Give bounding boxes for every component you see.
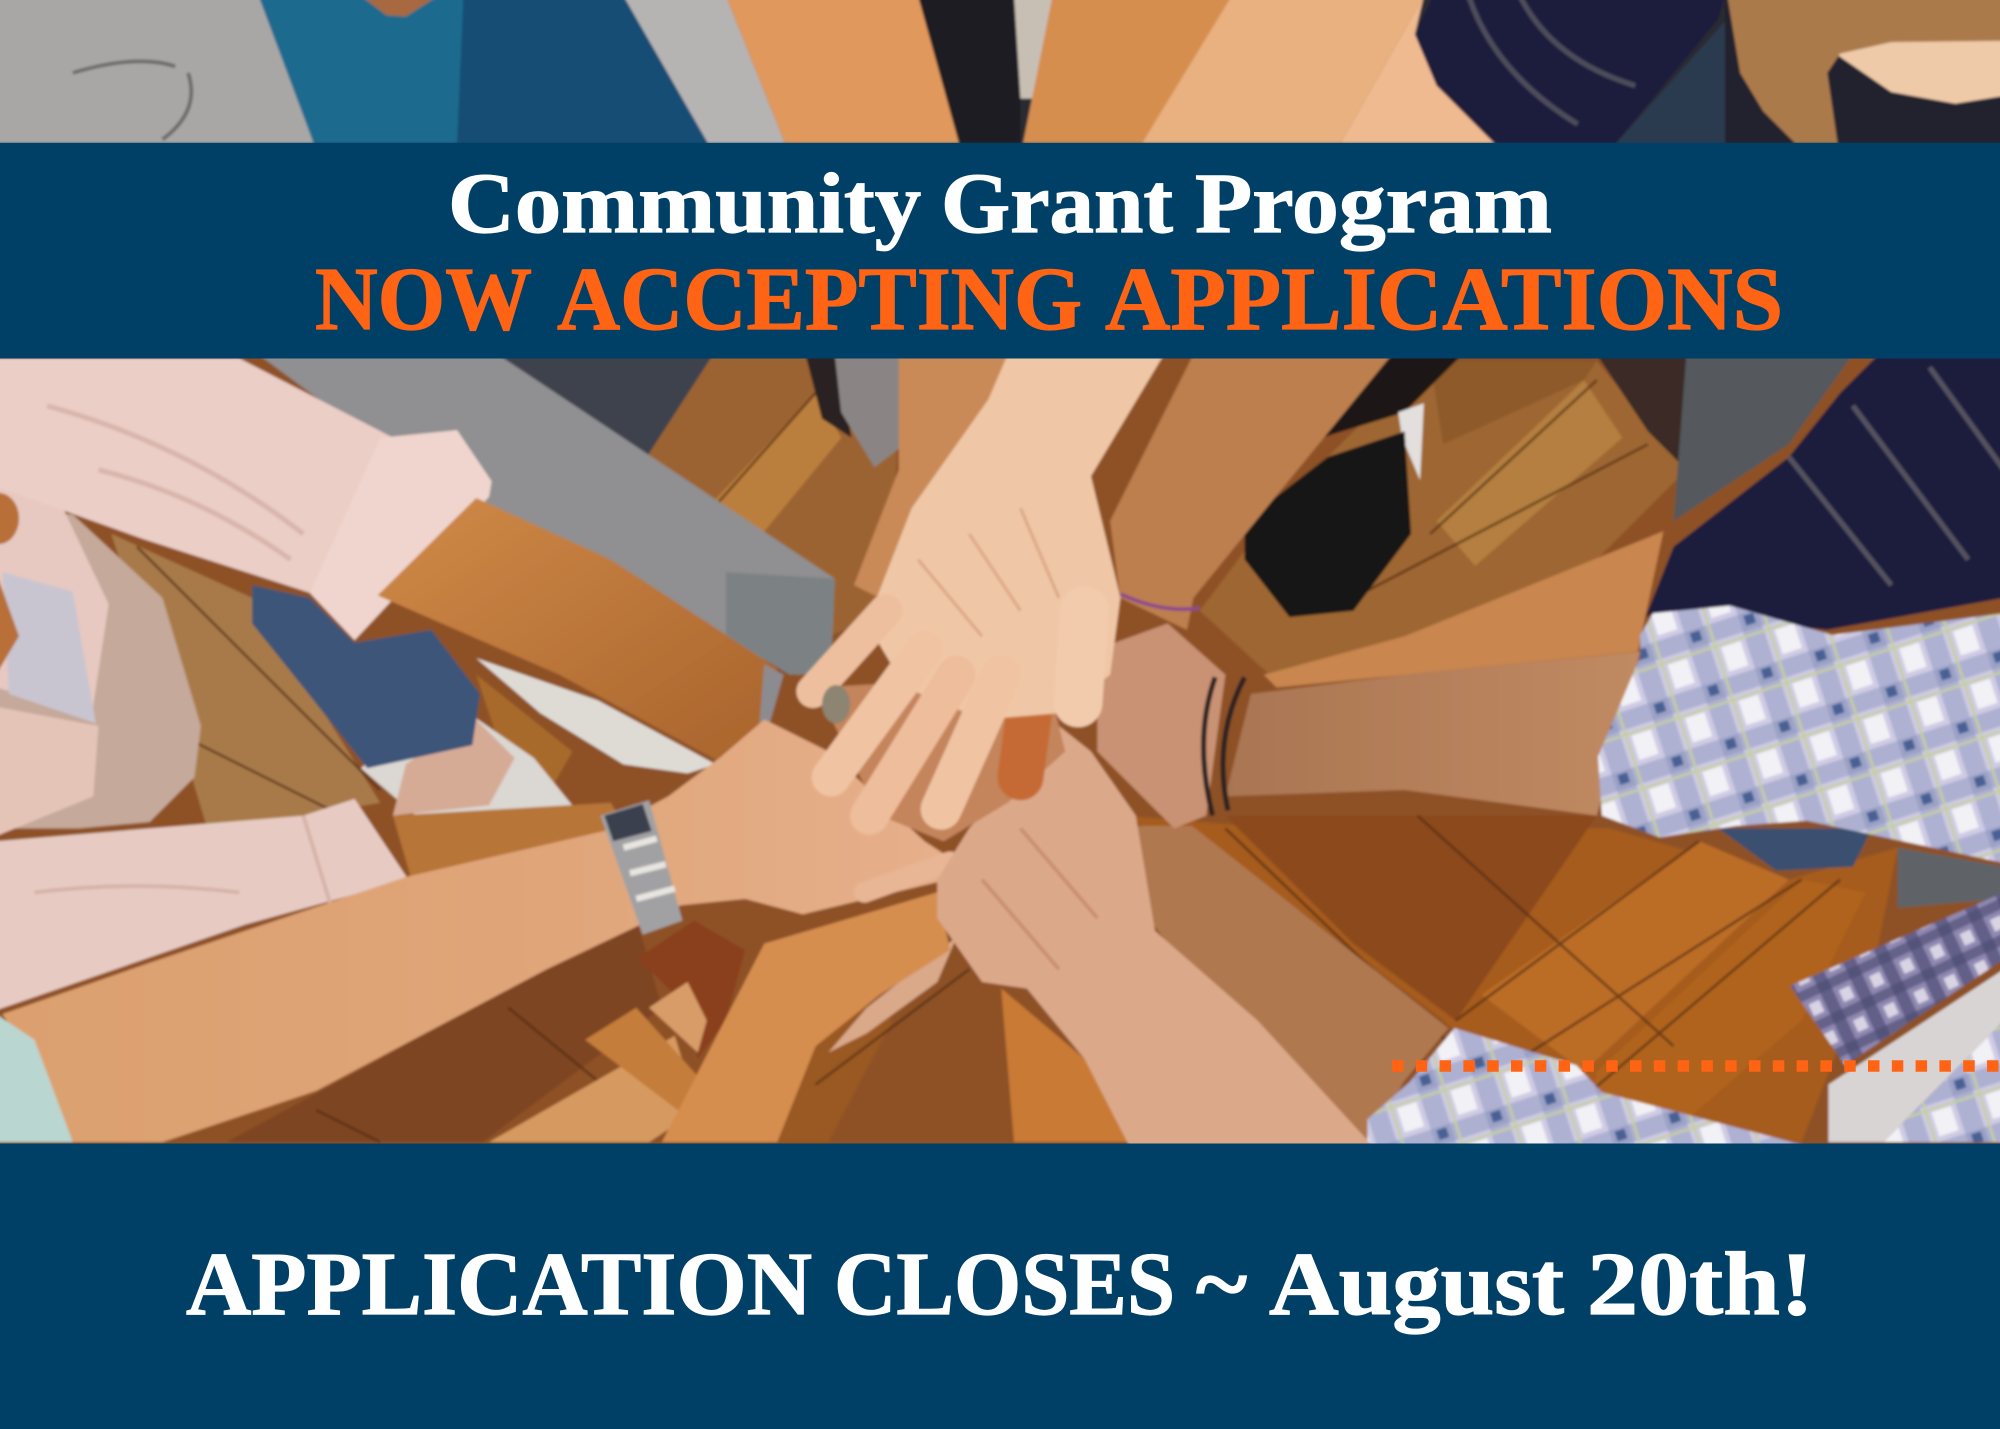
shoes, jeans and seated legs [0,508,716,828]
deadline text: 20th! [1587,1235,1814,1334]
brown forearms, left [378,498,784,882]
deadline text: CLOSES [834,1235,1175,1334]
pink blouse sleeves [0,358,492,1010]
deadline text [186,1235,1814,1334]
title: Community Grant Program: Program [1195,155,1552,251]
top photo strip [0,0,2000,143]
grey leg and dark trousers [259,355,913,675]
hairy forearms, right [1097,355,1663,1142]
black shoe and dark trousers, right [1245,355,1853,617]
title: Community Grant Program: Grant [941,155,1173,251]
wood floor [0,355,2000,1146]
top hand with fingers [813,355,1164,841]
main forearm, teal sleeve and watch [0,720,954,1142]
heading: now accepting applications: NOW [315,250,532,349]
lower centre hand [937,726,1373,1146]
sweater and plaid shirts, right [1368,355,2000,1146]
top banner [0,143,2000,358]
lower hands and bracelets [489,892,1129,1142]
deadline text: APPLICATION [186,1235,812,1334]
deadline text: ~ [1196,1235,1247,1334]
heading: now accepting applications: ACCEPTING [557,250,1082,349]
deadline text: August [1269,1235,1564,1334]
title: Community Grant Program [448,155,1552,251]
heading: now accepting applications [315,250,1783,349]
title: Community Grant Program: Community [448,155,921,251]
bottom banner [0,1144,2000,1429]
heading: now accepting applications: APPLICATIONS [1105,250,1783,349]
dotted orange line [1392,1060,2000,1072]
